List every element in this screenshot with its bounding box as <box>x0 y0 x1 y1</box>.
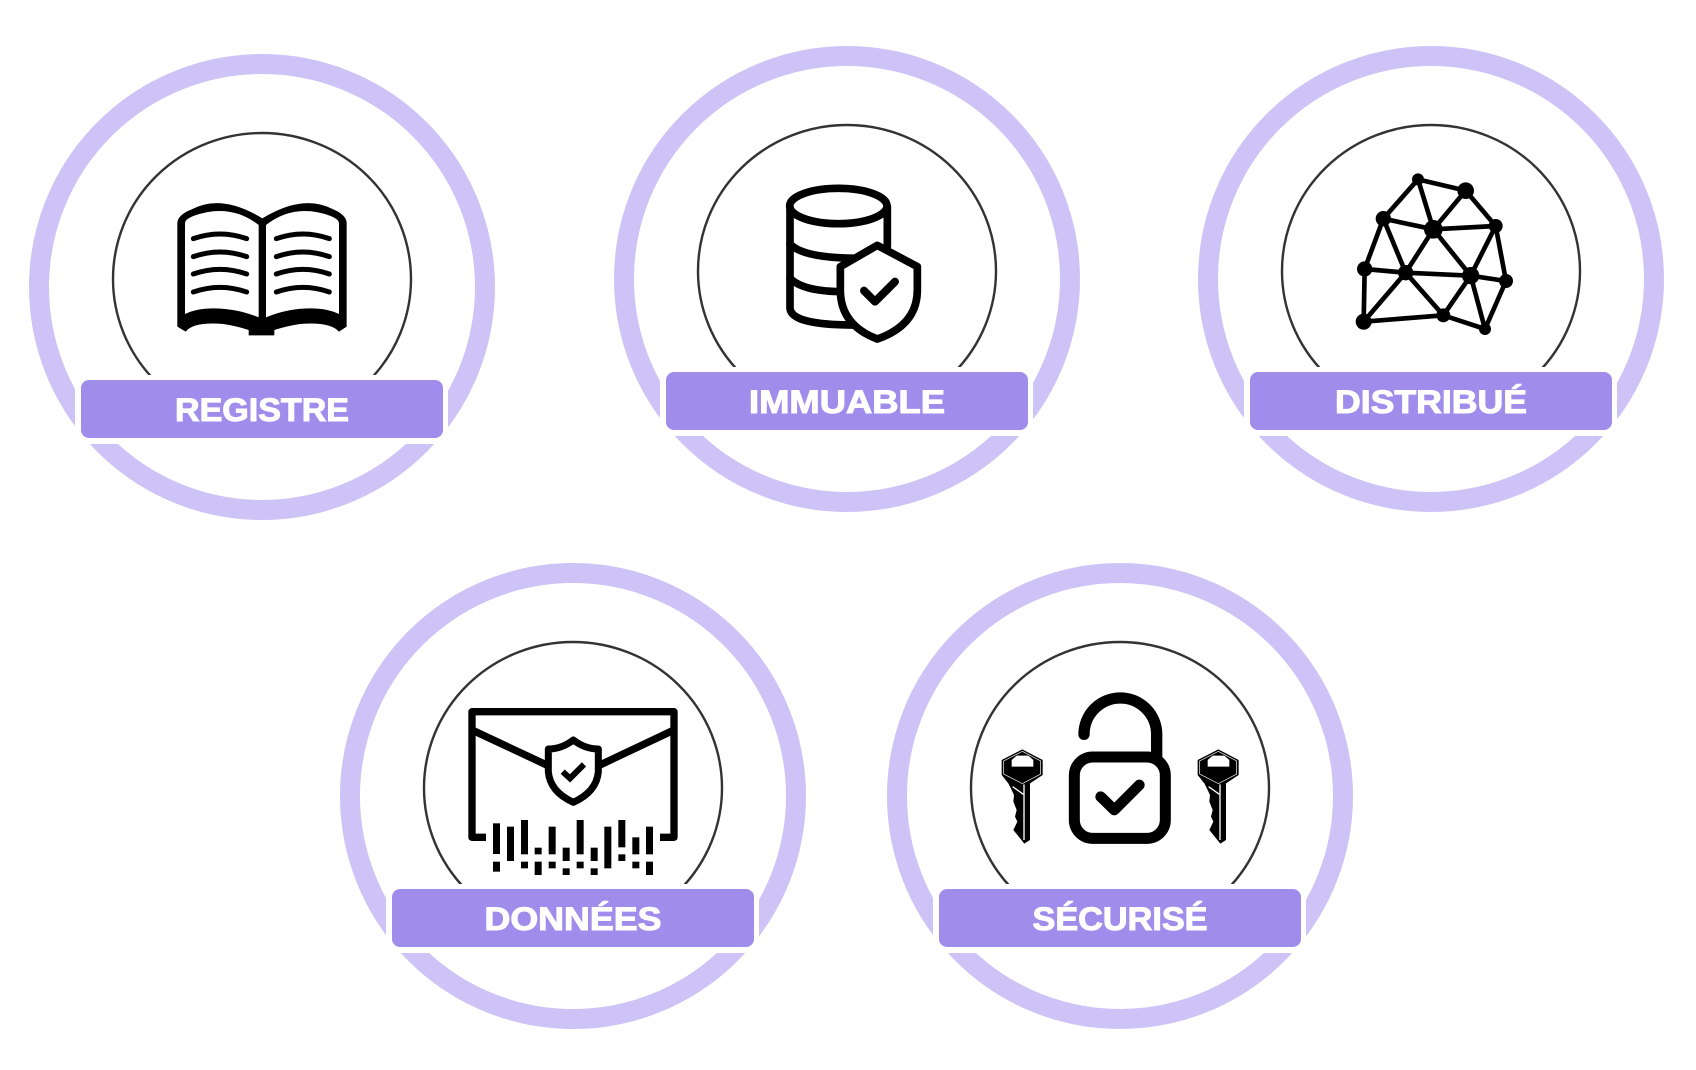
label cutout: sécurisé <box>933 884 1306 953</box>
label: distribué: DISTRIBUÉ <box>1335 384 1527 420</box>
label: sécurisé <box>939 889 1301 947</box>
inner circle: registre <box>113 133 411 425</box>
icon: network mesh <box>1356 173 1513 335</box>
label: distribué <box>1250 372 1612 430</box>
badge: sécurisé <box>897 573 1343 1019</box>
badge: distribué <box>1208 56 1654 502</box>
right key <box>1198 749 1239 844</box>
outer ring: immuable <box>624 56 1070 502</box>
label cutout: immuable <box>660 367 1033 436</box>
icon: open padlock and keys <box>1002 698 1239 844</box>
inner circle: distribué <box>1282 125 1580 417</box>
label: immuable: IMMUABLE <box>749 384 945 420</box>
badge: données <box>350 573 796 1019</box>
icon: secured envelope with data bars <box>472 712 674 875</box>
outer ring: registre <box>39 64 485 510</box>
label: données: DONNÉES <box>484 901 662 937</box>
left key <box>1002 749 1043 844</box>
icon: open book <box>177 203 347 335</box>
label cutout: distribué <box>1244 367 1617 436</box>
outer ring: distribué <box>1208 56 1654 502</box>
label cutout: données <box>386 884 759 953</box>
outer ring: données <box>350 573 796 1019</box>
inner circle: immuable <box>698 125 996 417</box>
label: registre: REGISTRE <box>175 392 349 428</box>
outer ring: sécurisé <box>897 573 1343 1019</box>
inner circle: données <box>424 642 722 934</box>
label cutout: registre <box>75 375 448 444</box>
icon: database with shield <box>790 188 917 339</box>
badge: registre <box>39 64 485 510</box>
padlock <box>1074 698 1165 838</box>
label: sécurisé: SÉCURISÉ <box>1032 901 1208 937</box>
inner circle: sécurisé <box>971 642 1269 934</box>
label: données <box>392 889 754 947</box>
badge: immuable <box>624 56 1070 502</box>
label: registre <box>81 380 443 438</box>
label: immuable <box>666 372 1028 430</box>
